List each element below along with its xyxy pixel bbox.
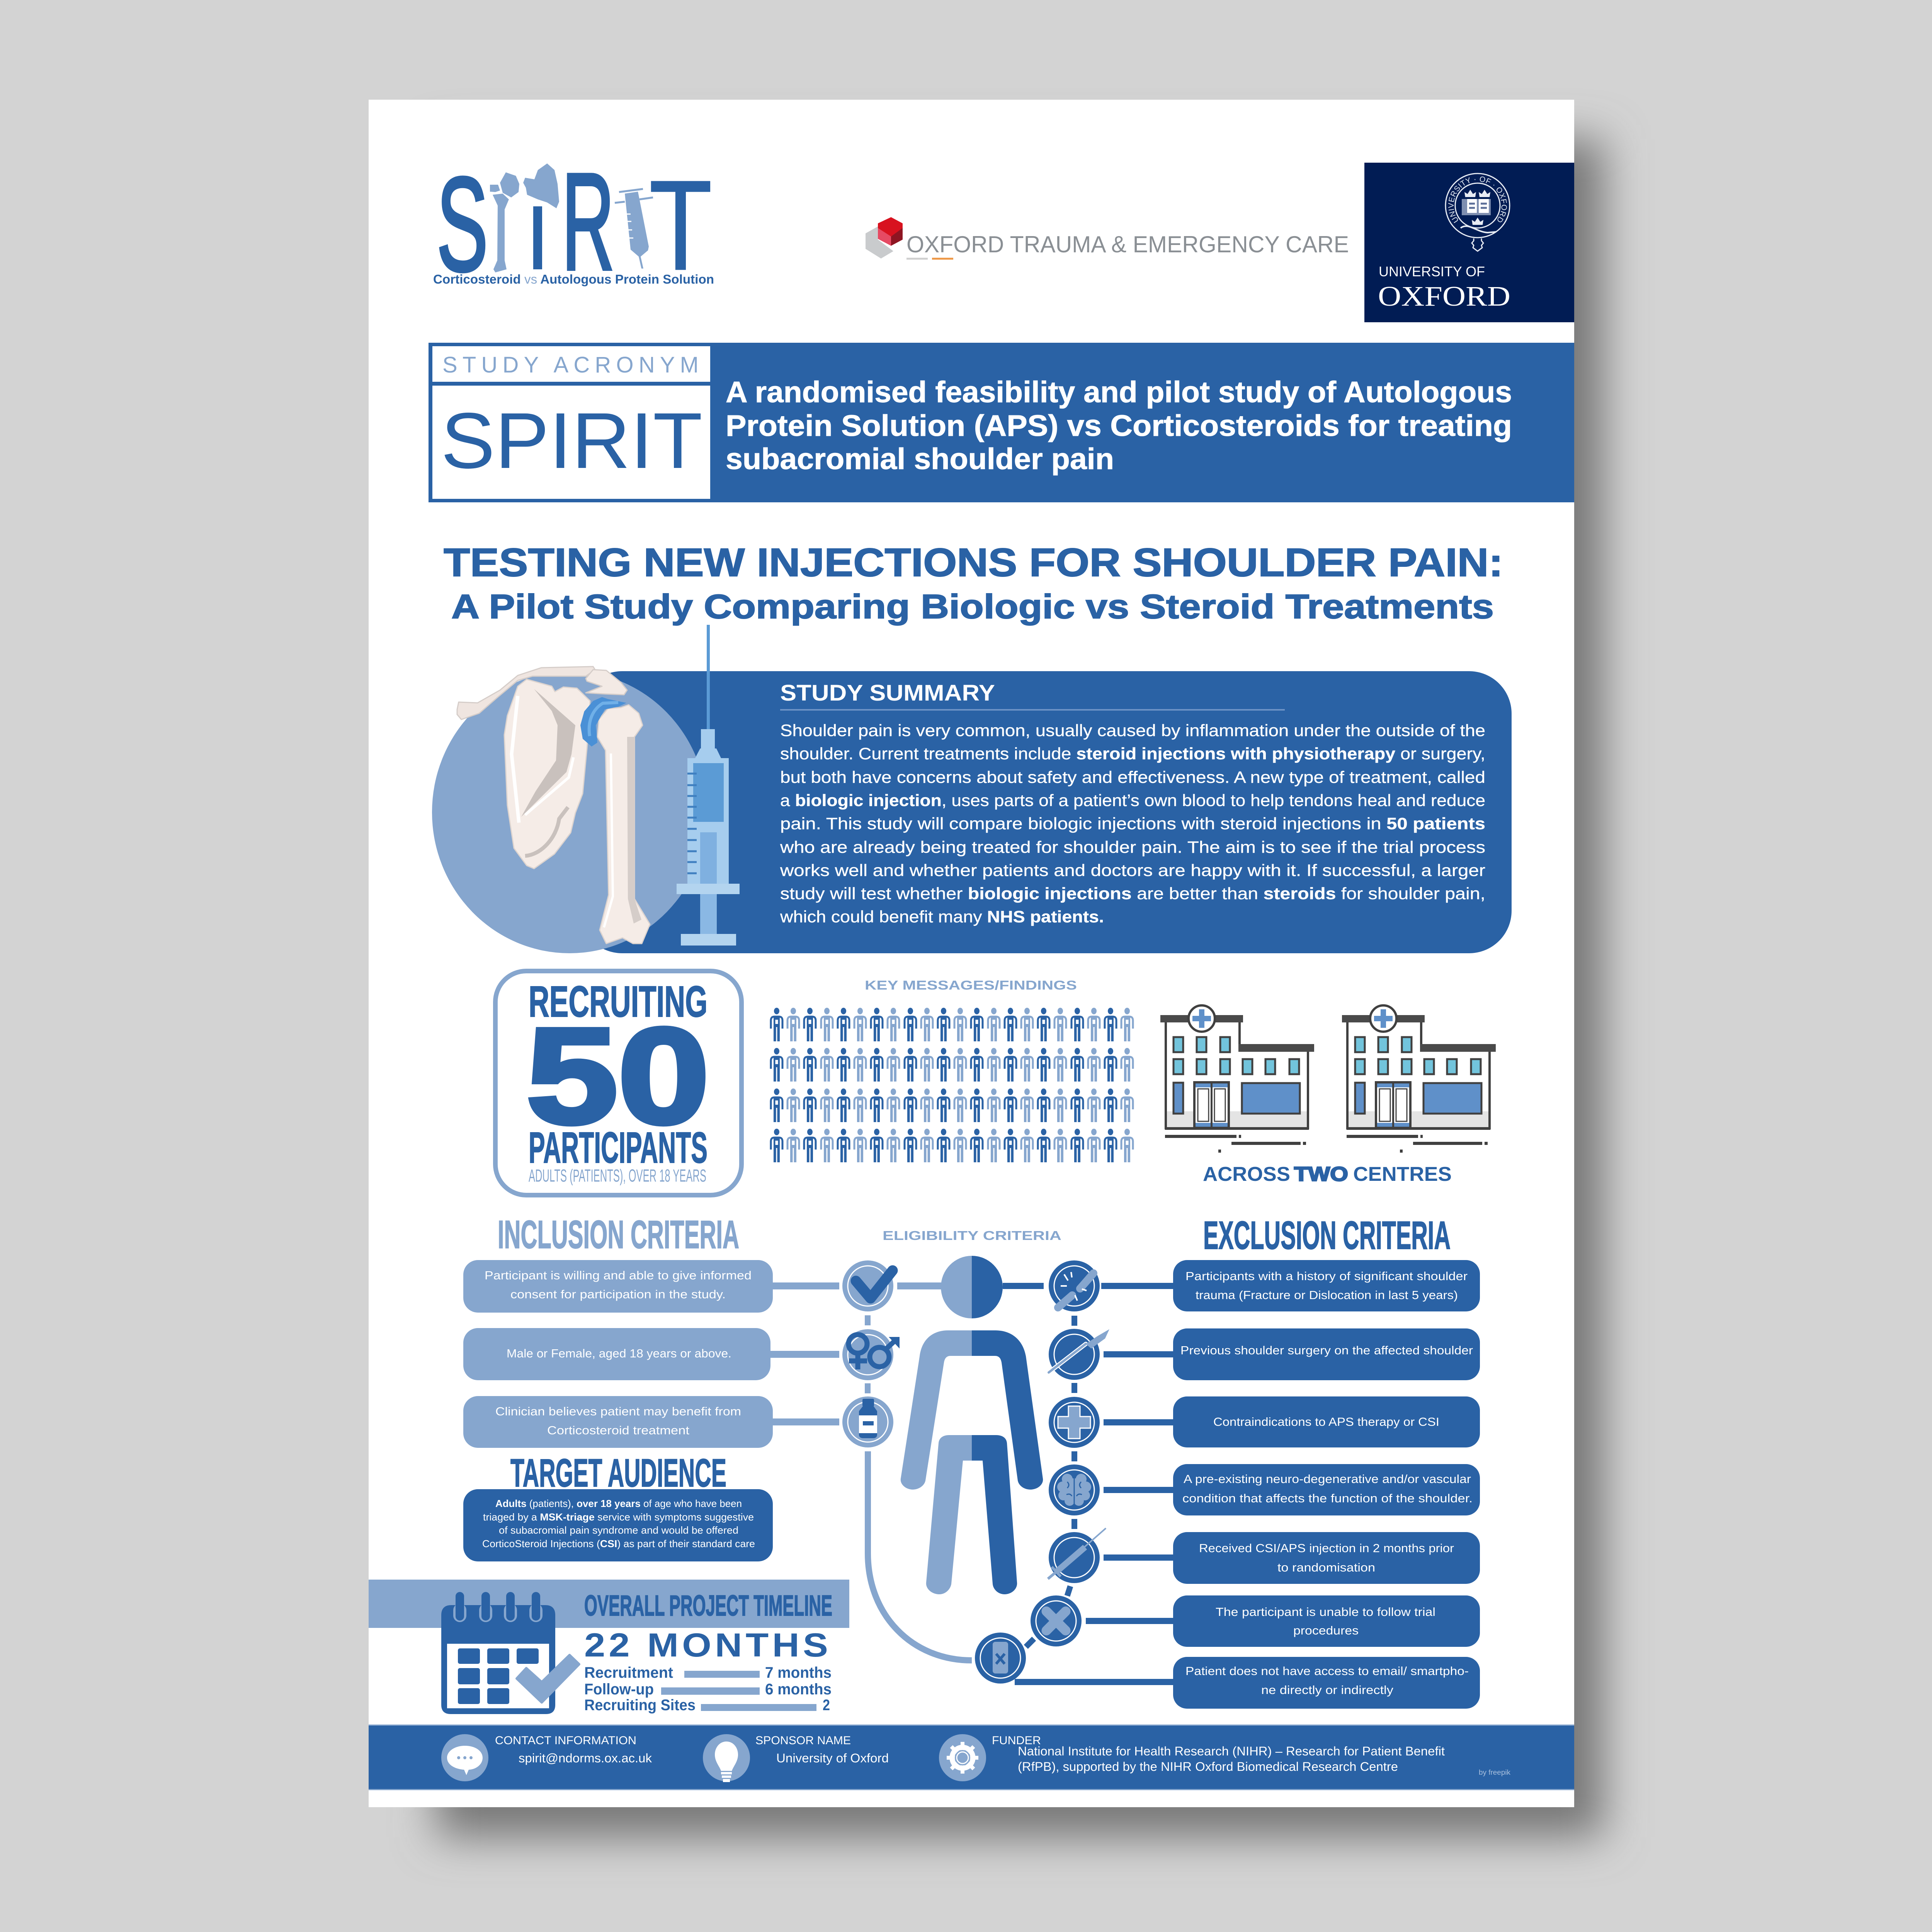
shoulder illustration [432,667,707,953]
main title [444,540,1503,626]
exclusion box: trauma: trauma (Fracture or Dislocation in last 5 years) [1196,1288,1458,1302]
connectors: exclusion side [1003,1283,1173,1685]
connectors: inclusion side [770,1282,972,1660]
icon: Oxford crest [1446,173,1510,251]
exclusion box: trial procedures: procedures [1293,1624,1359,1637]
study title: Protein Solution (APS) vs Corticosteroids for treating [726,409,1512,442]
icon: acromion [586,670,627,695]
exclusion box: trauma: Participants with a history of significant shoulder [1185,1269,1468,1283]
Oxford Trauma logo: OXFORD TRAUMA & EMERGENCY CARE [906,231,1349,257]
logo: scapula [523,163,559,208]
torso and arms [901,1330,1043,1490]
icon: gear [939,1734,986,1781]
heading: key messages: KEY MESSAGES/FINDINGS [865,978,1077,992]
summary text: shoulder. Current treatments include steroid injections with physiotherapy or surgery, [780,745,1485,763]
icon: hospital one [1160,1005,1314,1153]
icon: check circle [842,1260,893,1311]
legs [926,1435,1017,1594]
Oxford Trauma logo [866,217,1349,260]
summary text: study will test whether biologic injections are better than steroids for shoulder pain, [780,884,1485,903]
exclusion box: prior injection [1173,1532,1480,1584]
exclusion box: surgery: Previous shoulder surgery on the affected shoulder [1180,1344,1473,1357]
summary text: Shoulder pain is very common, usually caused by inflammation under the outside of the [780,721,1485,740]
number 50: 50 [526,1000,709,1152]
inclusion box: clinician: Clinician believes patient may benefit from [495,1405,741,1418]
University of Oxford logo: UNIVERSITY OF [1379,264,1485,279]
logo tagline: Corticosteroid vs Autologous Protein Solution [433,272,714,286]
study acronym label: STUDY ACRONYM [442,352,699,378]
inclusion box: consent: consent for participation in the study. [510,1287,726,1301]
inclusion box: age: Male or Female, aged 18 years or above. [507,1347,731,1360]
icon: brain circle [1049,1464,1100,1515]
footer band [369,1725,1574,1790]
summary text: pain. This study will compare biologic injections with steroid injections in 50 patients [780,815,1485,833]
SPIRIT logo [433,145,714,299]
funder: National Institute for Health Research (NIHR) – Research for Patient Benefit [1018,1744,1445,1758]
duration: 22 MONTHS [584,1627,832,1664]
icon: phone circle [975,1633,1026,1684]
icon: plus circle [1049,1397,1100,1448]
inclusion box: clinician [463,1396,773,1448]
label: across two centres: ACROSS [1203,1163,1290,1185]
exclusion box: prior injection: to randomisation [1277,1561,1375,1574]
study acronym label [432,346,710,382]
icon: bottle circle [842,1396,893,1447]
summary text: works well and whether patients and doctors are happy with it. If successful, a larger [780,861,1485,880]
exclusion box: trial procedures: The participant is unable to follow trial [1216,1605,1435,1619]
icon: scalpel circle [1049,1329,1109,1380]
SPIRIT logo: S [437,150,488,299]
main title: A Pilot Study Comparing Biologic vs Steroid Treatments [451,587,1494,626]
heading: target audience: TARGET AUDIENCE [510,1451,726,1495]
icon: syringe circle [1048,1528,1106,1583]
label: across two centres [1203,1163,1452,1185]
timeline stats: 6 months [765,1681,832,1698]
icon: calendar [441,1592,579,1714]
icon: lightbulb [703,1734,750,1782]
funder: (RfPB), supported by the NIHR Oxford Biomedical Research Centre [1018,1760,1398,1774]
icon: hospital two [1342,1005,1496,1153]
study title: subacromial shoulder pain [726,442,1114,476]
panel: recruiting 50 participants: ADULTS (PATIENTS), OVER 18 YEARS [529,1166,706,1185]
main title: TESTING NEW INJECTIONS FOR SHOULDER PAIN: [444,540,1503,585]
icon: syringe [677,625,740,946]
timeline stats: Recruitment [584,1664,673,1681]
SPIRIT logo: T [649,154,712,296]
exclusion box: trial procedures [1173,1595,1480,1647]
inclusion box: clinician: Corticosteroid treatment [547,1423,689,1437]
heading: exclusion criteria: EXCLUSION CRITERIA [1203,1213,1451,1257]
exclusion box: neuro-degenerative: A pre-existing neuro-degenerative and/or vascular [1184,1472,1471,1486]
icon: gender circle [842,1329,900,1380]
panel: target audience: Adults (patients), over 18 years of age who have been [495,1498,742,1509]
study title [726,376,1512,476]
panel: recruiting 50 participants: PARTICIPANTS [529,1123,707,1172]
exclusion box: smartphone [1173,1657,1480,1709]
logo: bone letter I [490,172,519,272]
exclusion box: surgery [1173,1328,1480,1380]
heading: eligibility criteria: ELIGIBILITY CRITERIA [883,1228,1061,1243]
icon: Oxford crest: UNIVERSITY · OF · OXFORD [1447,175,1508,224]
heading: study summary: STUDY SUMMARY [780,680,995,706]
icon: humerus [597,705,650,944]
summary text: who are already being treated for shoulder pain. The aim is to see if the trial process [780,838,1485,857]
study banner [429,343,1574,502]
exclusion box: prior injection: Received CSI/APS injection in 2 months prior [1199,1541,1454,1555]
exclusion box: neuro-degenerative [1173,1464,1480,1515]
funder [992,1734,1445,1774]
University of Oxford logo [1364,163,1574,322]
timeline stats: Follow-up [584,1681,654,1698]
page shadow [437,139,1604,1837]
SPIRIT acronym: SPIRIT [441,396,702,485]
exclusion box: contraindications [1173,1396,1480,1447]
funder: FUNDER [992,1734,1041,1747]
panel: project timeline [369,1580,849,1714]
exclusion box: smartphone: Patient does not have access to email/ smartpho- [1185,1664,1469,1678]
icon: clavicle [457,667,595,719]
sponsor name: SPONSOR NAME [755,1734,851,1747]
panel: project timeline: OVERALL PROJECT TIMELINE [584,1589,832,1622]
figure: human body [901,1256,1043,1594]
sponsor name: University of Oxford [776,1751,889,1765]
panel: recruiting 50 participants: RECRUITING [529,977,707,1026]
exclusion box: neuro-degenerative: condition that affects the function of the shoulder. [1182,1492,1473,1505]
label: across two centres: TWO [1294,1163,1348,1185]
timeline stats: Recruiting Sites [584,1697,696,1714]
contact information: CONTACT INFORMATION [495,1734,636,1747]
study title: A randomised feasibility and pilot study of Autologous [726,376,1512,409]
timeline stats: 7 months [765,1664,832,1681]
exclusion box: contraindications: Contraindications to APS therapy or CSI [1213,1415,1439,1429]
inclusion box: consent: Participant is willing and able to give informed [485,1269,752,1282]
inclusion box: consent [463,1260,773,1313]
icon: cross circle [1031,1595,1082,1646]
icon: fracture circle [1049,1260,1100,1311]
panel: recruiting 50 participants [495,971,742,1195]
sponsor name [755,1734,889,1765]
inclusion box: age [463,1328,770,1380]
icon: hexagon mark [866,217,903,259]
logo: syringe letter I [615,189,653,269]
summary text: but both have concerns about safety and effectiveness. A new type of treatment, called [780,768,1485,787]
SPIRIT logo: R [562,145,614,299]
summary text [780,721,1485,926]
icon: cartilage [580,697,626,747]
panel: study summary [580,671,1512,953]
poster page [369,100,1574,1807]
icon: scapula [504,679,590,869]
exclusion box: smartphone: ne directly or indirectly [1261,1683,1394,1697]
freepik credit: by freepik [1479,1769,1511,1776]
icon: chat [441,1734,488,1781]
head [941,1256,1003,1318]
heading: inclusion criteria: INCLUSION CRITERIA [498,1213,739,1257]
timeline stats [584,1664,832,1714]
pictogram: participants [771,1008,1133,1162]
University of Oxford logo: OXFORD [1378,281,1510,312]
label: across two centres: CENTRES [1353,1163,1452,1185]
summary text: which could benefit many NHS patients. [780,908,1104,926]
contact information [495,1734,652,1765]
panel: target audience: CorticoSteroid Injections ( CSI) as part of their standard care [482,1538,755,1549]
exclusion box: trauma [1173,1260,1480,1311]
timeline stats: 2 [823,1697,830,1714]
panel: target audience [463,1489,773,1561]
summary text: a biologic injection , uses parts of a patient’s own blood to help tendons heal and reduce [780,791,1485,810]
contact information: spirit@ndorms.ox.ac.uk [519,1751,652,1765]
panel: target audience: triaged by a MSK-triage service with symptoms suggestive [483,1511,754,1523]
panel: target audience: of subacromial pain syndrome and would be offered [499,1524,738,1536]
